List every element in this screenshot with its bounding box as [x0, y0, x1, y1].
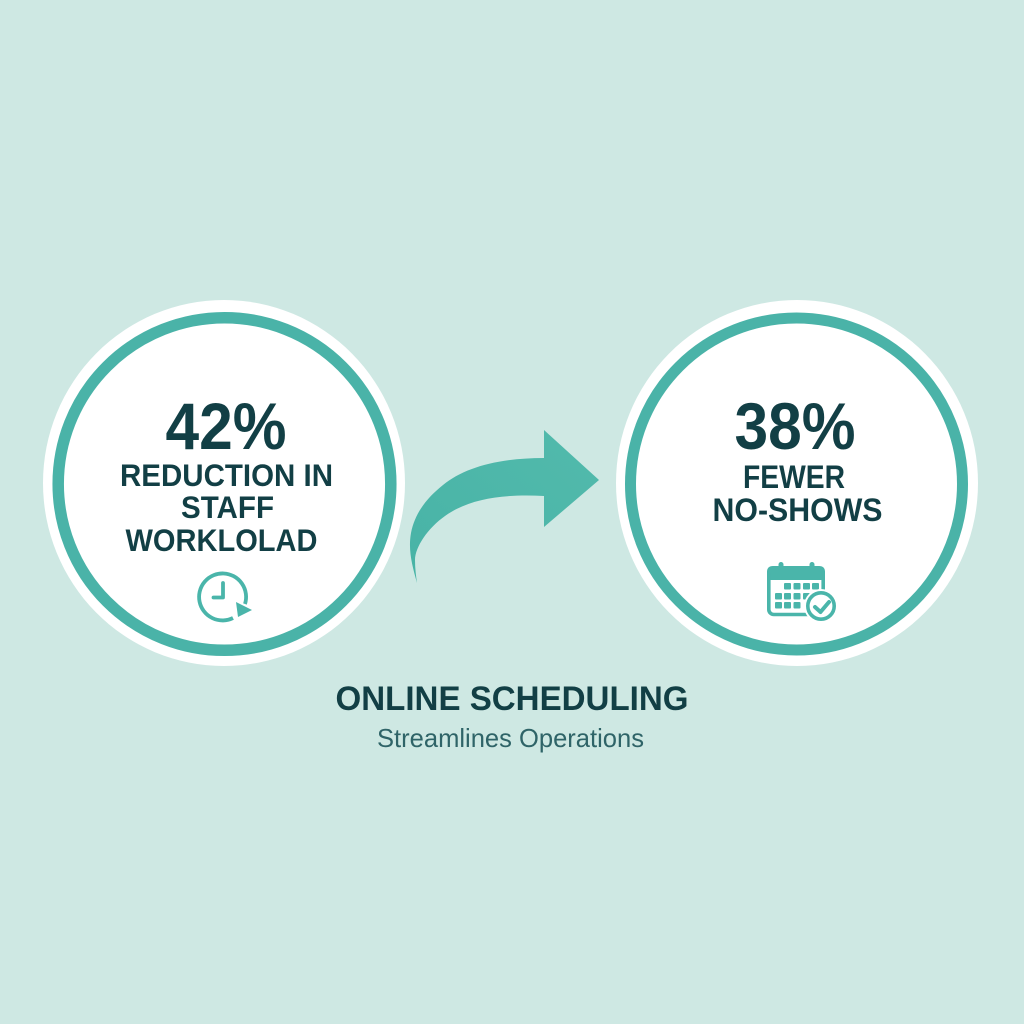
- label: reduction in staff workload: WORKLOLAD: [126, 522, 318, 558]
- label: fewer no-shows: NO-SHOWS: [712, 492, 882, 528]
- panel: no-shows stat: [616, 300, 978, 666]
- label: fewer no-shows: [712, 459, 882, 528]
- arrow: curved arrow to the right: [410, 430, 599, 583]
- label: fewer no-shows: FEWER: [743, 459, 845, 495]
- label: reduction in staff workload: [120, 457, 333, 558]
- stat: 38%: 38%: [734, 389, 856, 463]
- panel: staff workload stat: [43, 300, 405, 666]
- label: reduction in staff workload: REDUCTION IN: [120, 457, 333, 493]
- icon: clock with arrow: [199, 573, 252, 620]
- stat: 42%: 42%: [166, 389, 286, 463]
- subheading: streamlines operations: Streamlines Operations: [377, 723, 644, 753]
- icon: calendar with check: [767, 562, 838, 623]
- heading: online scheduling: ONLINE SCHEDULING: [336, 680, 688, 718]
- label: reduction in staff workload: STAFF: [181, 489, 274, 525]
